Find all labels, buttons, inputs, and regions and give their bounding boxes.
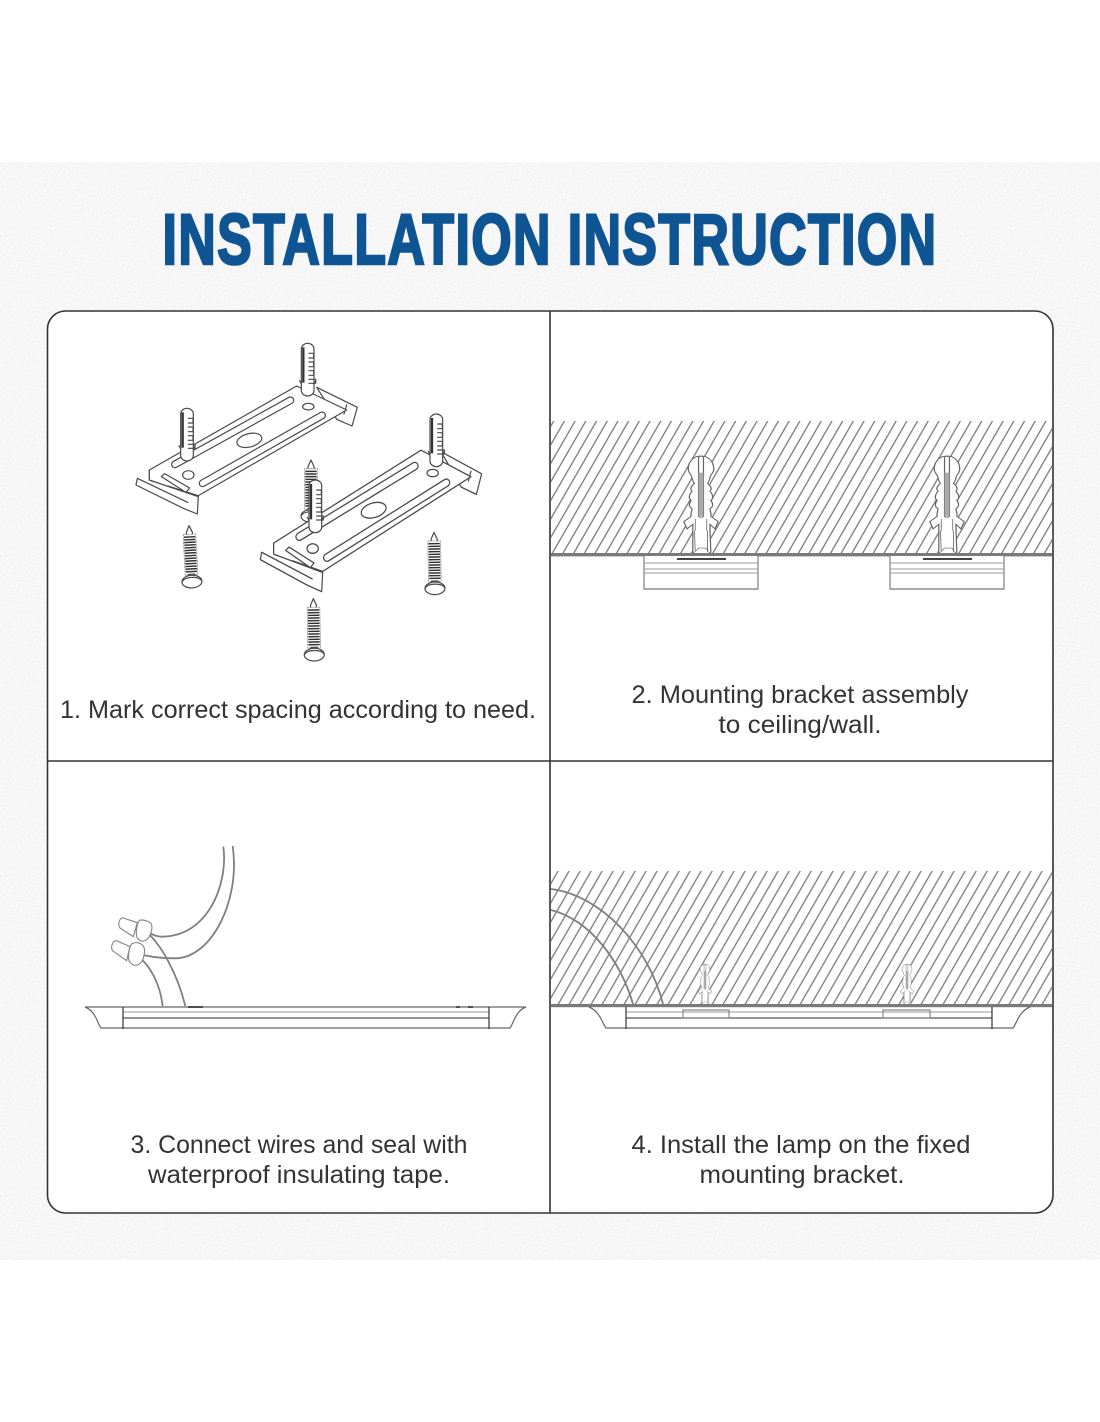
caption 3: 3. Connect wires and seal with (130, 1131, 468, 1159)
panel: step 2 mounting bracket (551, 421, 1052, 739)
panel: step 1 mark spacing (60, 343, 536, 724)
caption 4 (632, 1131, 970, 1189)
caption 2: to ceiling/wall. (718, 711, 882, 739)
textured background band (0, 162, 1100, 1260)
caption 4: mounting bracket. (700, 1161, 904, 1189)
caption 4: 4. Install the lamp on the fixed (632, 1131, 970, 1159)
illustration: brackets, wall anchors and screws (136, 343, 482, 661)
caption 3 (130, 1131, 468, 1189)
illustration: wires, connectors and lamp (85, 846, 526, 1029)
caption 1: 1. Mark correct spacing according to need. (60, 696, 536, 724)
caption 2 (632, 681, 969, 739)
panel frame: four-step grid (48, 311, 1053, 1213)
illustration: ceiling with anchors and brackets (551, 421, 1052, 589)
panel: step 3 connect wires (85, 846, 526, 1189)
panel: step 4 install lamp (551, 871, 1052, 1189)
caption 2: 2. Mounting bracket assembly (632, 681, 969, 709)
caption 3: waterproof insulating tape. (147, 1161, 450, 1189)
illustration: ceiling, wires and installed lamp (551, 871, 1052, 1029)
